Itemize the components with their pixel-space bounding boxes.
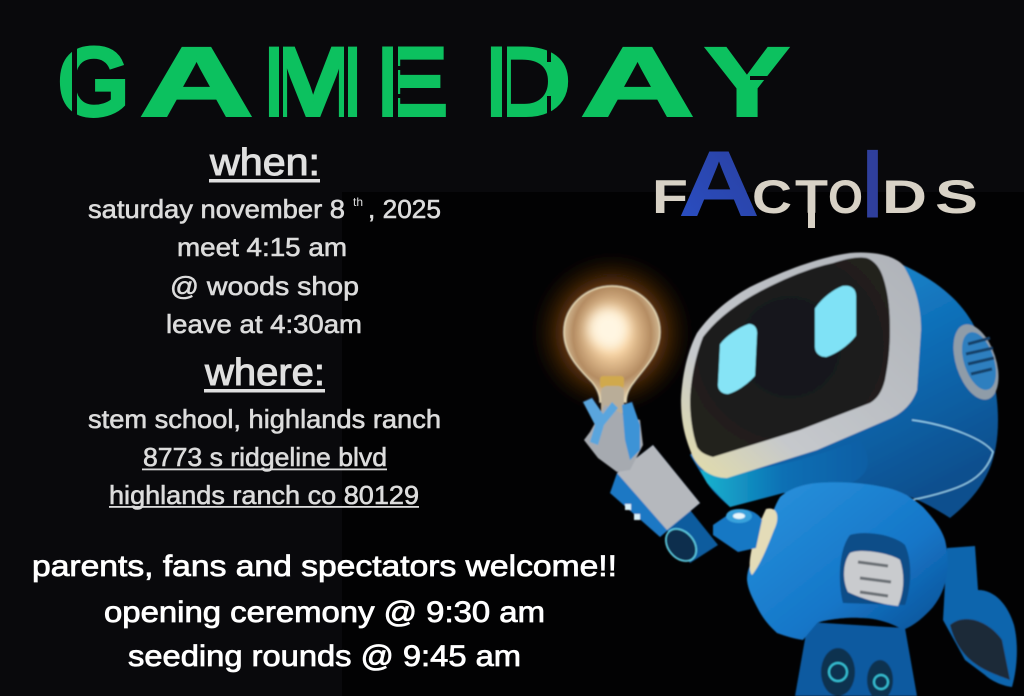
- title: game day: G: [57, 26, 130, 137]
- logo: factoids: T: [795, 170, 828, 223]
- event notes: [32, 550, 617, 673]
- meet place: @ woods shop: [170, 271, 359, 301]
- shoulder connector: [713, 509, 762, 552]
- title: game day: A: [580, 26, 695, 137]
- bulb glow: [530, 251, 694, 415]
- leave time: leave at 4:30am: [166, 309, 362, 339]
- screen: [690, 257, 890, 457]
- logo: factoids: A: [678, 131, 760, 236]
- logo: factoids: C: [752, 170, 792, 223]
- date line: , 2025: [368, 194, 441, 224]
- robot holding light bulb: [530, 251, 1017, 696]
- welcome line: parents, fans and spectators welcome!!: [32, 550, 617, 583]
- meet time: meet 4:15 am: [177, 232, 347, 262]
- ear speaker: [945, 319, 1007, 405]
- forearm cylinder: [659, 510, 718, 567]
- left eye: [720, 326, 755, 392]
- logo: factoids: I: [864, 131, 881, 236]
- date line: th: [353, 195, 363, 209]
- head lower glow: [700, 440, 868, 507]
- logo: factoids: [652, 131, 978, 236]
- light bulb: [564, 286, 660, 416]
- where section: [88, 352, 441, 510]
- venue: stem school, highlands ranch: [88, 404, 441, 434]
- title: game day: E: [376, 26, 449, 137]
- forearm panel: [610, 445, 700, 537]
- logo: factoids: F: [652, 170, 688, 223]
- title: game day: D: [484, 26, 572, 137]
- robot torso: [747, 482, 948, 640]
- title: game day: A: [139, 26, 254, 137]
- city address: highlands ranch co 80129: [109, 480, 419, 510]
- logo: factoids: S: [935, 170, 978, 223]
- title: game day: [57, 26, 790, 137]
- hand: [583, 398, 643, 472]
- logo: factoids: O: [828, 170, 863, 223]
- when section: [88, 142, 441, 339]
- chest panel: [840, 533, 910, 606]
- street address: 8773 s ridgeline blvd: [143, 442, 387, 472]
- opening ceremony: opening ceremony @ 9:30 am: [104, 596, 545, 629]
- robot right arm: [943, 546, 1017, 687]
- heading: where: where:: [204, 352, 325, 394]
- logo: factoids: D: [882, 170, 927, 223]
- robot legs: [795, 622, 917, 696]
- head seam line: [912, 420, 993, 500]
- robot head shell: [690, 255, 998, 518]
- seeding rounds: seeding rounds @ 9:45 am: [128, 640, 521, 673]
- title: game day: M: [262, 26, 364, 137]
- heading: when: when:: [209, 142, 320, 184]
- date line: saturday november 8: [88, 194, 345, 224]
- right eye: [817, 288, 854, 355]
- title: game day: Y: [704, 26, 790, 137]
- shoulder collar: [750, 509, 777, 575]
- date line: [88, 194, 441, 224]
- screen frame: [681, 253, 921, 478]
